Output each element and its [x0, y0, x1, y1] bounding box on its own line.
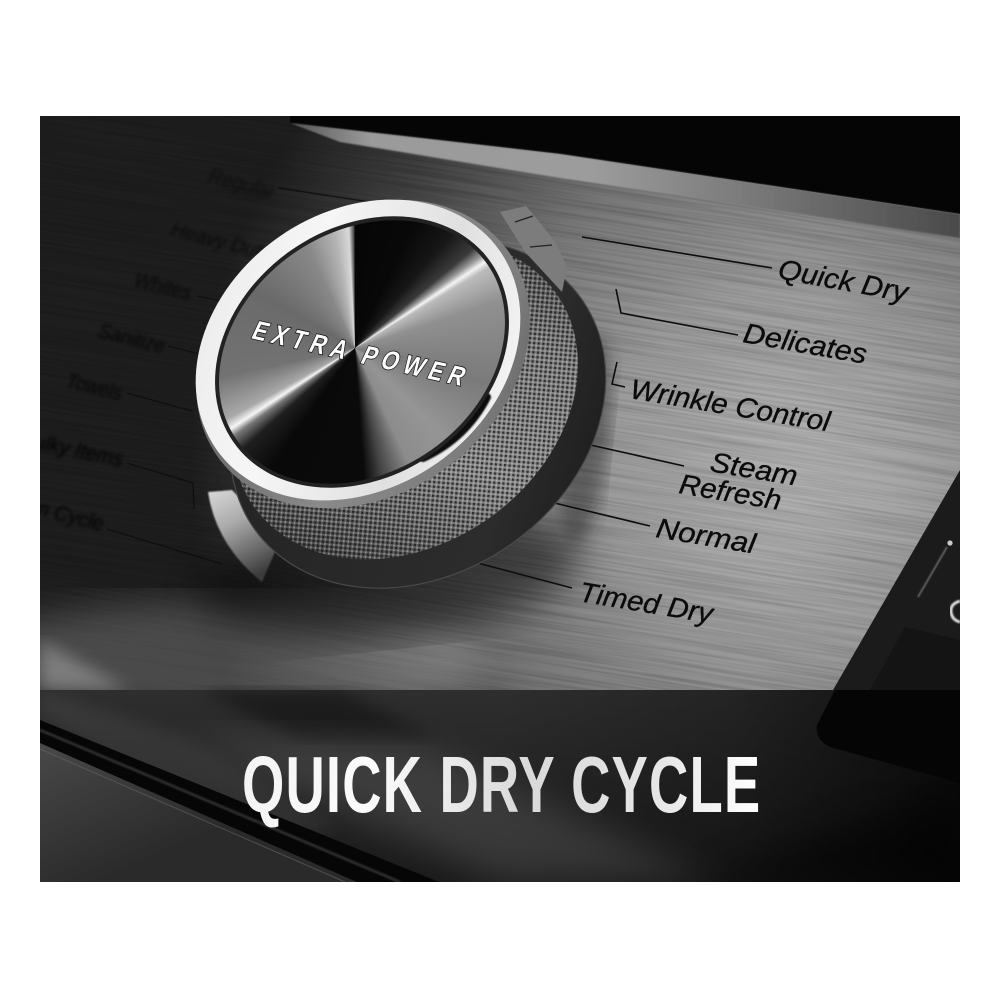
label: Regular: Regular	[206, 165, 278, 205]
dial pointer	[500, 206, 567, 292]
title band	[40, 690, 960, 882]
icon: rotary dial	[196, 200, 606, 589]
face rim	[215, 216, 509, 488]
photo: washer control panel	[40, 116, 960, 882]
display window	[833, 470, 960, 690]
label: Towels: Towels	[64, 370, 125, 406]
label: Wrinkle Control: Wrinkle Control	[628, 373, 833, 437]
knurled side	[240, 256, 578, 560]
label: Bulky Items: Bulky Items	[19, 427, 126, 472]
panel top edge highlight	[290, 123, 960, 238]
dial shadow	[195, 493, 585, 657]
label: Quick Dry: Quick Dry	[776, 253, 912, 308]
ring reflection	[423, 397, 487, 458]
cycle leader lines: left	[107, 188, 383, 564]
title: QUICK DRY CYCLE	[242, 741, 760, 830]
label: Delicates: Delicates	[741, 317, 869, 370]
label: Timed Dry: Timed Dry	[577, 576, 717, 630]
label: Steam: Steam	[708, 446, 800, 491]
cycle labels: left	[40, 180, 266, 530]
chrome bright ring	[196, 200, 520, 500]
dial face	[219, 220, 505, 484]
cycle labels: right	[577, 253, 912, 630]
panel: brushed metal surface	[40, 116, 960, 690]
cycle leader lines: right	[479, 236, 772, 589]
label: Heavy Duty: Heavy Duty	[169, 218, 275, 267]
label: Normal: Normal	[654, 512, 759, 560]
label: Whites: Whites	[132, 269, 194, 305]
label: Refresh: Refresh	[677, 468, 784, 516]
crescent reflection under dial	[208, 490, 280, 582]
dial label: EXTRA POWER	[247, 317, 471, 392]
dial base ring	[231, 246, 606, 589]
chrome bezel side	[196, 200, 530, 508]
label: Sanitize: Sanitize	[96, 320, 167, 358]
